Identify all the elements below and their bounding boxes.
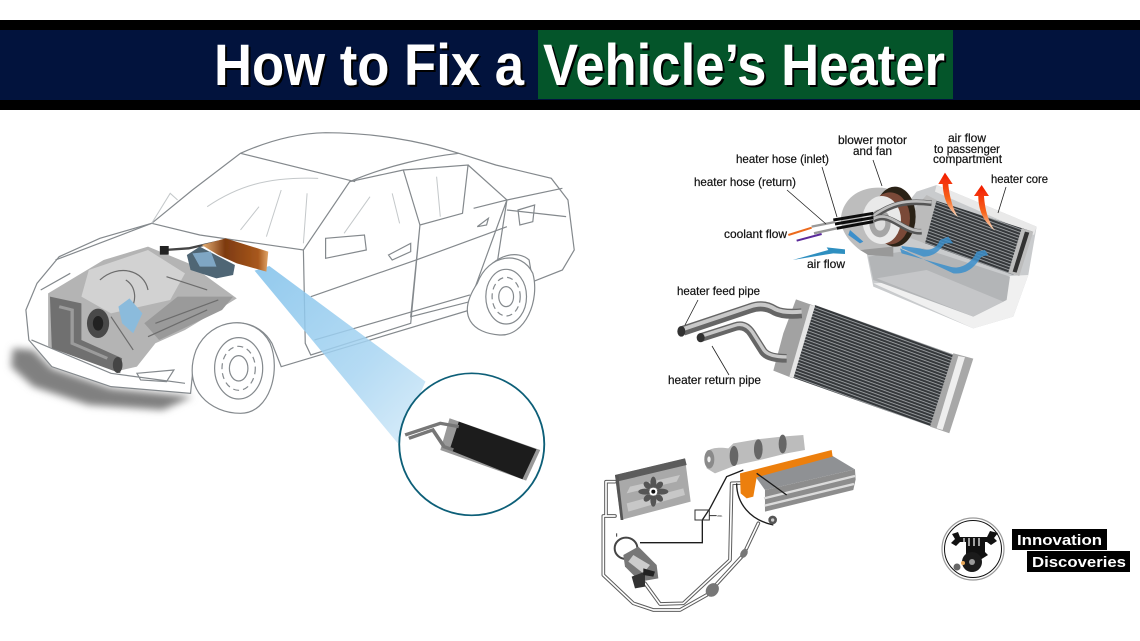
beam to detail xyxy=(255,266,426,443)
evaporator stack xyxy=(740,450,856,512)
heater core unit xyxy=(677,299,973,433)
coolant flow arrows xyxy=(788,228,812,235)
label leader lines xyxy=(685,160,1006,375)
title text: Vehicle’s Heater xyxy=(545,35,947,100)
title highlight xyxy=(538,30,953,99)
blower motor and fan xyxy=(841,187,916,257)
heater core highlight xyxy=(202,238,268,272)
windows and door lines xyxy=(31,153,566,383)
air flow arrow xyxy=(793,247,845,260)
inner air arrows xyxy=(900,237,988,273)
climate system diagram: 88b xyxy=(717,514,723,518)
wrench and fist xyxy=(951,531,998,560)
pipes xyxy=(603,482,758,610)
diagram labels: air flow xyxy=(948,131,986,145)
upper core xyxy=(923,200,1033,275)
diagram labels: heater core xyxy=(991,172,1048,186)
blower row xyxy=(704,435,805,473)
title banner xyxy=(0,20,1140,110)
inline fittings xyxy=(703,516,777,599)
diagram labels: compartment xyxy=(933,152,1003,166)
diagram labels: heater hose (inlet) xyxy=(736,152,829,166)
condenser with fan xyxy=(615,458,691,520)
climate system diagram xyxy=(603,435,856,610)
logo wordmark: Discoveries xyxy=(1032,554,1126,571)
end cap xyxy=(930,353,973,433)
diagram labels: heater hose (return) xyxy=(694,175,796,189)
diagram labels: coolant flow xyxy=(724,227,787,241)
title text xyxy=(214,33,947,100)
front wheel xyxy=(192,323,274,413)
title text: How to Fix a xyxy=(214,33,525,98)
hoses to heater xyxy=(165,242,218,250)
control wires xyxy=(640,470,787,543)
blower housing xyxy=(187,247,235,278)
end tank xyxy=(773,299,815,378)
radiator xyxy=(50,297,122,373)
diagram labels: heater feed pipe xyxy=(677,284,760,298)
diagram labels: to passenger xyxy=(934,142,1000,156)
housing xyxy=(867,185,1037,328)
diagram labels: air flow xyxy=(807,257,845,271)
car body xyxy=(26,133,574,393)
detail circle xyxy=(399,373,544,515)
hoses xyxy=(833,213,873,228)
engine bay xyxy=(48,247,237,373)
title text: Vehicle’s Heater xyxy=(543,33,945,98)
fan blades xyxy=(638,477,668,507)
water pump xyxy=(118,298,142,333)
car cutaway illustration xyxy=(11,133,574,515)
title text: How to Fix a xyxy=(216,35,527,100)
brand logo xyxy=(942,518,1130,580)
rear wheel xyxy=(467,258,535,335)
logo wordmark: Innovation xyxy=(1017,532,1102,549)
return pipe xyxy=(702,326,787,358)
pipes upper xyxy=(873,202,932,232)
diagram labels: heater return pipe xyxy=(668,373,761,387)
logo emblem xyxy=(942,518,1004,580)
ground shadow xyxy=(11,348,192,410)
compressor xyxy=(615,533,658,588)
diagram labels: blower motor xyxy=(838,133,907,147)
heater core system diagram xyxy=(788,173,1037,328)
logo wordmark xyxy=(1012,529,1130,572)
diagram labels xyxy=(668,131,1048,387)
core fins xyxy=(792,305,955,427)
relay box xyxy=(695,510,717,520)
red arrows xyxy=(938,173,958,217)
fan xyxy=(87,309,109,338)
diagram labels: and fan xyxy=(853,144,892,158)
feed pipe xyxy=(683,306,802,331)
